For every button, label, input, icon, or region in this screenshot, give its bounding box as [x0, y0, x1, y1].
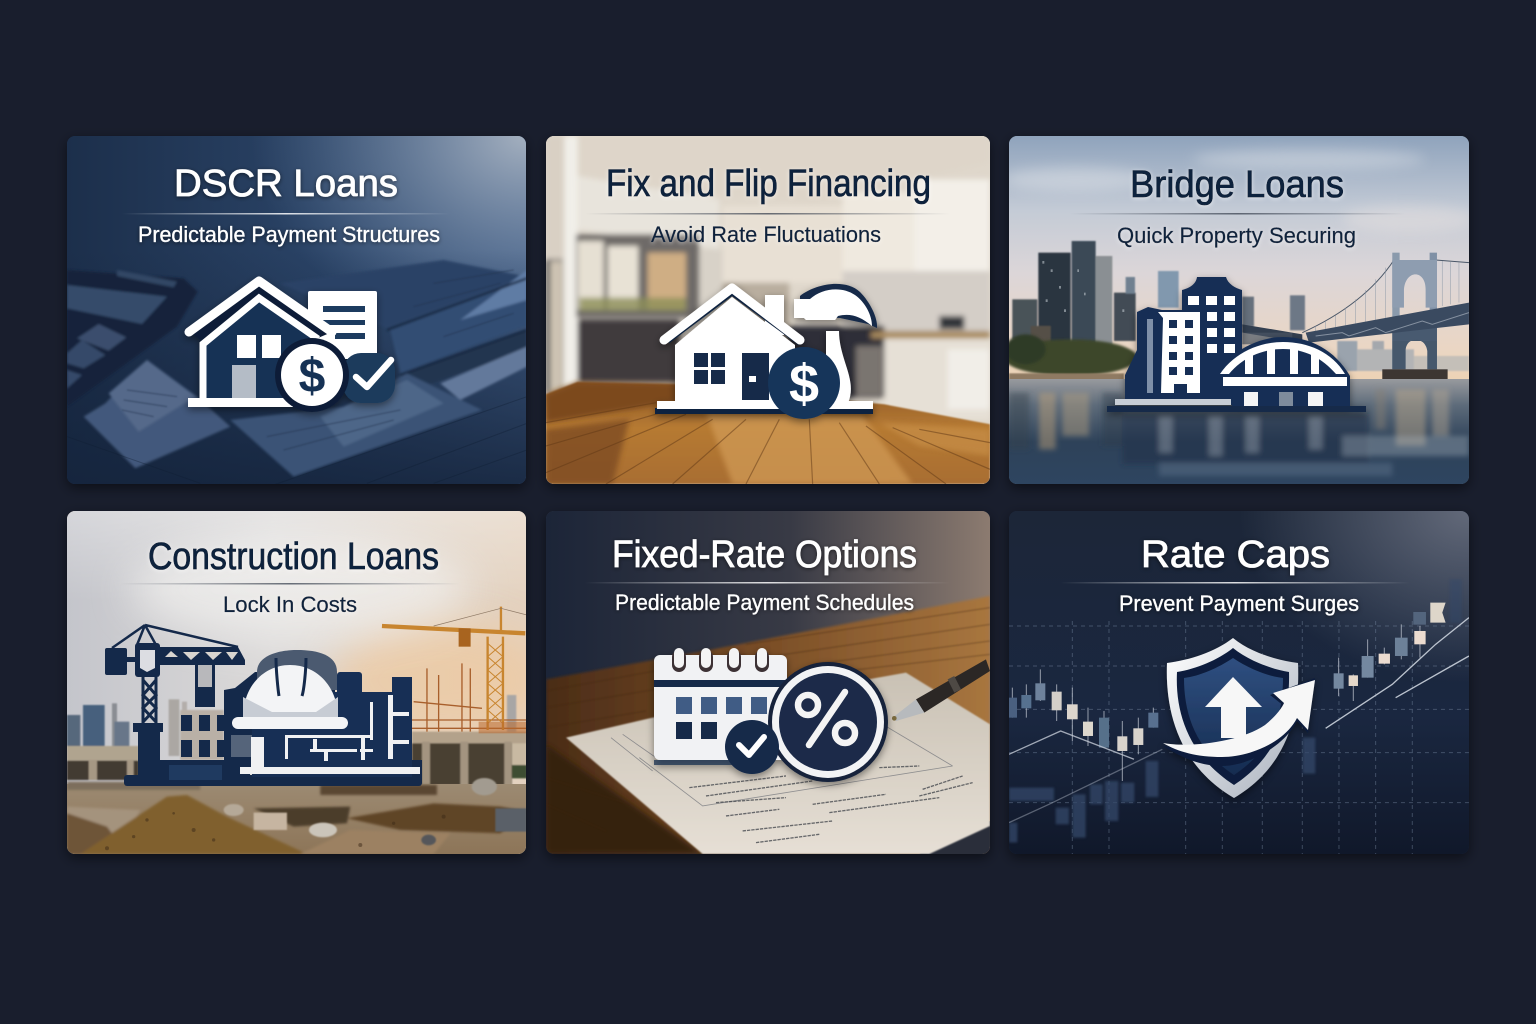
- title: DSCR Loans: DSCR Loans: [174, 163, 398, 205]
- panel: Fixed-Rate Options: [546, 511, 990, 854]
- panel: Construction Loans: [67, 511, 550, 854]
- subtitle: Predictable Payment Structures: Predictable Payment Structures: [138, 222, 440, 247]
- photo background: kitchen with wood floor: [546, 136, 990, 484]
- panel: Rate Caps: [1009, 511, 1469, 854]
- icon: crane, hard hat and blueprint building: [105, 625, 422, 786]
- panel: Fix and Flip Financing: [546, 136, 990, 484]
- icon: buildings and bridge: [1107, 277, 1366, 412]
- icon: house with hammer and dollar: $: [789, 354, 819, 414]
- title: Fix and Flip Financing: Fix and Flip Financing: [606, 163, 931, 205]
- icon: calendar with percent and check: [654, 648, 888, 782]
- subtitle: Lock In Costs: Lock In Costs: [223, 592, 357, 617]
- photo background: wooden desk with paperwork and pen: [546, 511, 990, 854]
- icon: house with hammer and dollar: [655, 284, 877, 419]
- photo background: calculator and documents: [67, 136, 527, 485]
- title: Rate Caps: Rate Caps: [1141, 534, 1330, 576]
- panel: DSCR Loans: [67, 136, 527, 485]
- icon: shield with up arrow and swoosh: [1163, 638, 1315, 798]
- icon: house with document, dollar and check: [188, 281, 395, 412]
- subtitle: Prevent Payment Surges: Prevent Payment Surges: [1119, 591, 1359, 616]
- chart background: candlesticks and grid: [1009, 511, 1469, 854]
- photo background: skyline, bridge and river: [1002, 136, 1476, 484]
- title: Construction Loans: Construction Loans: [148, 536, 439, 578]
- subtitle: Predictable Payment Schedules: Predictable Payment Schedules: [615, 590, 914, 615]
- subtitle: Avoid Rate Fluctuations: Avoid Rate Fluctuations: [651, 222, 881, 247]
- panel: Bridge Loans: [1002, 136, 1476, 484]
- subtitle: Quick Property Securing: Quick Property Securing: [1117, 223, 1356, 248]
- photo background: construction site: [67, 511, 550, 854]
- title: Fixed-Rate Options: Fixed-Rate Options: [612, 534, 917, 576]
- title: Bridge Loans: Bridge Loans: [1130, 164, 1344, 206]
- icon: house with document, dollar and check: $: [299, 350, 326, 403]
